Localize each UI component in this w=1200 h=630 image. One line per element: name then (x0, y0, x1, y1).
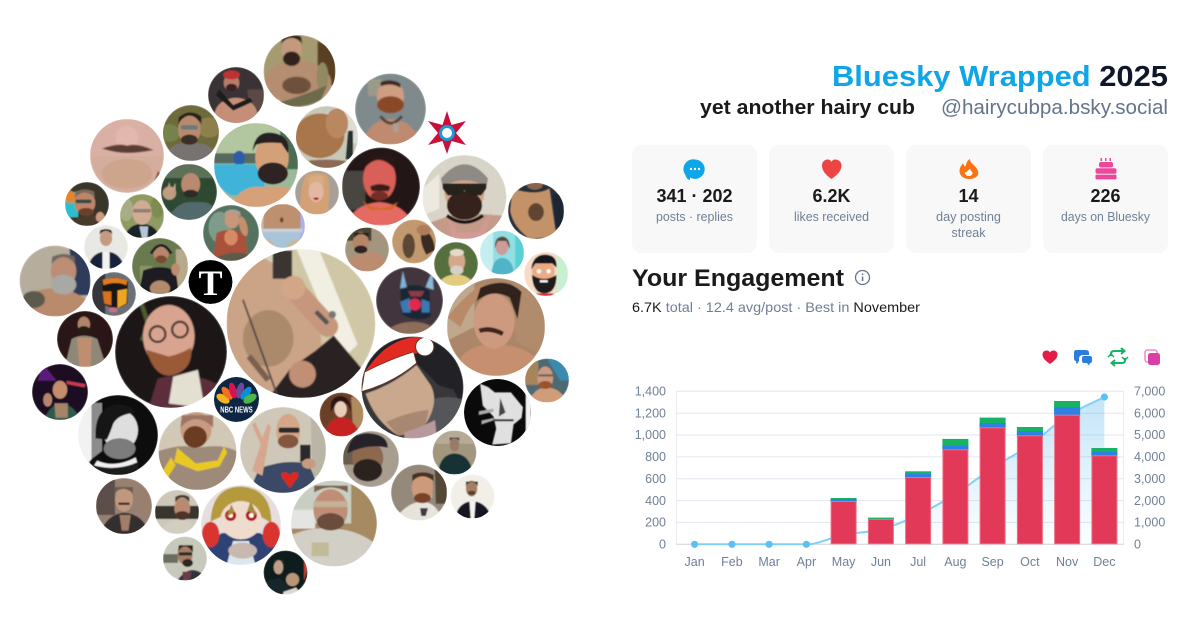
stat card: posts (632, 145, 757, 253)
left axis labels: 400 (645, 494, 666, 508)
left axis labels (635, 384, 666, 552)
avatar: man in green sweater (432, 430, 476, 474)
avatar: teal-lit woman (480, 230, 524, 274)
avatar: bald with glasses (119, 194, 164, 238)
cumulative area (695, 397, 1104, 544)
avatar: white shirt and tie (391, 464, 447, 520)
avatar: blue puppy hood (376, 267, 443, 334)
avatar: man in blazer (84, 225, 128, 269)
left axis labels: 800 (645, 450, 666, 464)
avatar: hairy chest (508, 181, 564, 239)
avatar: cartoon bearded man (524, 252, 568, 296)
engagement chart (635, 384, 1165, 569)
icon: cake (1096, 158, 1116, 179)
right axis labels: 4,000 (1134, 450, 1165, 464)
right axis labels: 0 (1134, 538, 1141, 552)
right axis labels: 1,000 (1134, 516, 1165, 530)
avatar: belly and briefs (261, 204, 305, 248)
month labels: Oct (1020, 555, 1040, 569)
stat card: days on Bluesky (1043, 145, 1168, 253)
legend: replies chat (1074, 350, 1092, 366)
chart legend (1042, 348, 1160, 366)
avatar: white tee with pocket (291, 480, 377, 566)
avatar: orange puppy hood (92, 272, 136, 316)
avatar: red cap and harness (208, 67, 264, 123)
avatar: club selfie (32, 364, 88, 420)
month labels (685, 555, 1116, 569)
avatar: blonde woman (295, 170, 339, 214)
avatar: older man in yellow shirt (434, 242, 478, 286)
icon: info (856, 270, 870, 284)
right axis labels: 6,000 (1134, 406, 1165, 420)
month labels: Jan (685, 555, 705, 569)
month labels: Aug (944, 555, 967, 569)
avatar: couple photo (264, 550, 308, 594)
icon: heart (822, 160, 842, 179)
avatar: plaid shirt with peace sign (240, 407, 326, 493)
line markers (691, 393, 1108, 548)
avatar: red-lit man with mustache (342, 148, 420, 226)
avatar: dark cap and beard (343, 431, 399, 487)
icon: flame (960, 159, 978, 179)
month labels: Feb (721, 555, 743, 569)
left axis labels: 200 (645, 516, 666, 530)
avatar: black and white portrait (78, 395, 158, 475)
avatar: man on couch (155, 490, 199, 534)
right axis labels: 3,000 (1134, 472, 1165, 486)
avatar: poolside selfie (214, 123, 298, 207)
right axis labels: 5,000 (1134, 428, 1165, 442)
month labels: Jun (871, 555, 891, 569)
right axis labels (1134, 384, 1165, 552)
avatar: NYT logo: T (198, 263, 223, 303)
stat value: 14 (958, 186, 978, 206)
avatar: mustache closeup (90, 119, 164, 193)
avatar: green floral shirt (203, 205, 259, 261)
avatar: ginger with blue background (525, 358, 569, 402)
avatar: black and white sketch (464, 379, 531, 446)
avatar: big shirtless mirror selfie (226, 249, 376, 398)
avatar: NBC news logo (214, 377, 259, 422)
stacked bars: red likes (831, 415, 1117, 544)
avatar: woman in red sweater (320, 392, 364, 436)
month labels: Mar (758, 555, 780, 569)
avatar: man in robe (57, 311, 113, 367)
stat label: day posting (936, 210, 1001, 224)
avatar: bald man with round glasses (115, 296, 227, 408)
month labels: Sep (981, 555, 1004, 569)
stat value: 226 (1090, 186, 1120, 206)
left axis labels: 1,200 (635, 406, 666, 420)
avatar: hat and black glasses (422, 155, 506, 239)
stacked bars: blue replies (831, 407, 1117, 502)
engagement summary: 6.7K total · 12.4 avg/post · Best in November (632, 299, 920, 315)
avatar: grey beard tattoo (20, 246, 91, 316)
stat label: days on Bluesky (1061, 210, 1151, 224)
subtitle: display name: yet another hairy cub (700, 97, 915, 119)
stat value: 341 · 202 (656, 186, 732, 206)
avatar: man in dark suit (450, 474, 494, 518)
avatar: glasses teal orange (65, 182, 109, 226)
avatar: NYT logo (188, 260, 232, 304)
legend: quotes squares (1145, 350, 1160, 365)
legend: reposts arrows (1108, 348, 1128, 366)
left axis labels: 600 (645, 472, 666, 486)
avatar: anime character (201, 485, 281, 565)
avatar: shirtless tattooed man (264, 35, 336, 107)
avatar: yellow harness (158, 412, 236, 490)
stat value: 6.2K (812, 186, 850, 206)
stat card: streak (906, 145, 1031, 253)
section heading: Your Engagement (632, 265, 844, 292)
avatar: NBC news logo: NBC NEWS (220, 406, 253, 415)
icon: speech bubble (683, 159, 705, 180)
legend: likes heart (1042, 350, 1058, 364)
cumulative line (695, 397, 1104, 544)
avatar: santa hat selfie (362, 336, 464, 438)
month labels: Jul (910, 555, 926, 569)
avatar: armpit and beard (392, 220, 436, 264)
right axis labels: 2,000 (1134, 494, 1165, 508)
stat label: likes received (794, 210, 869, 224)
title: Bluesky Wrapped 2025 (832, 61, 1168, 93)
grid lines (676, 391, 1124, 544)
avatar collage (20, 35, 569, 594)
avatar: ginger beard with necklace (355, 74, 426, 144)
avatar: hoodie with mustache (96, 478, 152, 534)
month labels: Dec (1093, 555, 1116, 569)
left axis labels: 1,400 (635, 384, 666, 398)
stacked bars: green reposts (831, 401, 1117, 521)
avatar: mustache in bed (447, 278, 545, 376)
avatar: man with headphones (132, 238, 188, 296)
subtitle: handle: @hairycubpa.bsky.social (941, 97, 1168, 119)
avatar: peace sign in leaves (161, 164, 217, 220)
stat card: likes (769, 145, 894, 253)
avatar: glasses in garden (160, 105, 221, 161)
avatar: backside photo (295, 106, 358, 168)
avatar: lying bearded man (345, 228, 389, 272)
month labels: May (832, 555, 856, 569)
left axis labels: 1,000 (635, 428, 666, 442)
month labels: Nov (1056, 555, 1079, 569)
stat label: posts · replies (656, 210, 733, 224)
avatar: sunglasses profile (163, 536, 207, 580)
month labels: Apr (797, 555, 816, 569)
stat label second line: streak (952, 226, 986, 240)
right axis labels: 7,000 (1134, 384, 1165, 398)
avatar: chicago star (428, 111, 466, 154)
left axis labels: 0 (659, 538, 666, 552)
